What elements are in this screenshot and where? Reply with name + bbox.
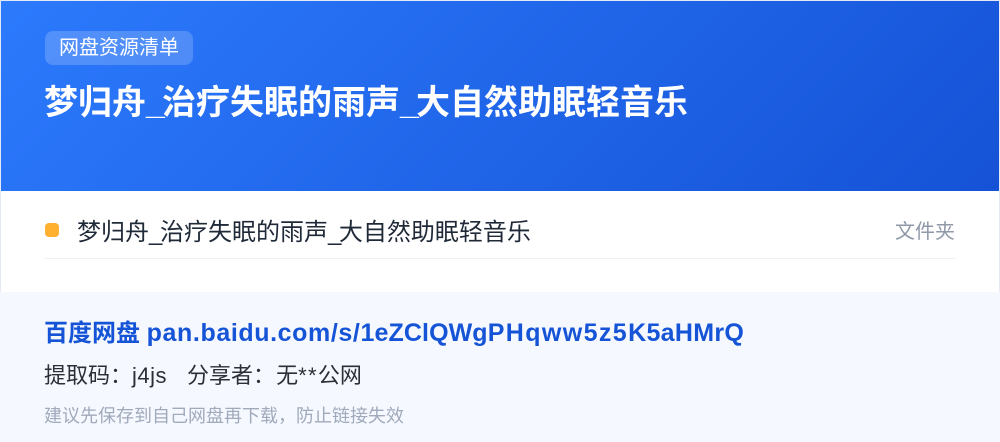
icon: orange file marker (45, 223, 59, 237)
badge: 网盘资源清单 (45, 31, 193, 65)
hint text: 建议先保存到自己网盘再下载，防止链接失效 (44, 406, 404, 426)
share link: 百度网盘 pan.baidu.com/s/1eZClQWgPHqww5z5K5aHMrQ (44, 319, 744, 347)
row divider (45, 258, 955, 259)
panel: share details (0, 292, 1000, 442)
title: 梦归舟_治疗失眠的雨声_大自然助眠轻音乐 (44, 84, 688, 122)
file type label: 文件夹 (895, 221, 955, 243)
badge: 网盘资源清单: 网盘资源清单 (59, 37, 179, 59)
access code and sharer: 提取码：j4js 分享者：无**公网 (44, 363, 362, 388)
file name: 梦归舟_治疗失眠的雨声_大自然助眠轻音乐 (77, 219, 531, 246)
header panel (1, 1, 999, 191)
